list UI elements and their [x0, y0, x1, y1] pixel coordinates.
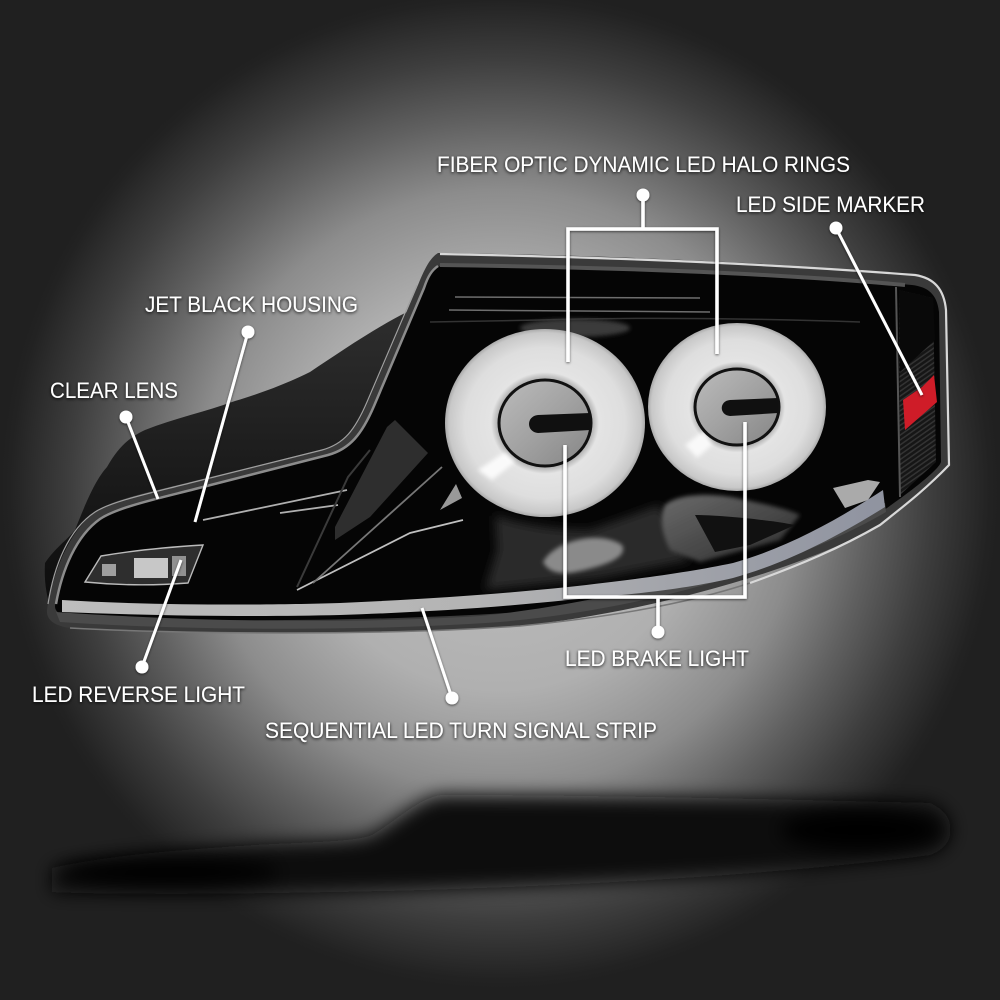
chrome trim left — [56, 266, 438, 604]
turn signal strip — [62, 490, 885, 616]
gray reflection panel — [335, 420, 428, 540]
right gray shape — [662, 495, 800, 562]
label: halo rings: FIBER OPTIC DYNAMIC LED HALO RINGS — [437, 152, 850, 177]
reverse line — [142, 560, 181, 667]
tail light assembly — [45, 253, 950, 633]
label: housing: JET BLACK HOUSING — [145, 292, 358, 317]
side marker panel — [896, 287, 937, 497]
housing line — [195, 332, 248, 522]
turn signal line — [422, 608, 452, 698]
label: brake light: LED BRAKE LIGHT — [565, 646, 749, 671]
top bezel band — [440, 265, 905, 285]
gloss bump — [543, 538, 623, 573]
center bar — [529, 413, 590, 433]
black lens body — [55, 265, 941, 620]
label: turn signal: SEQUENTIAL LED TURN SIGNAL STRIP — [265, 718, 657, 743]
inner lens — [499, 380, 591, 466]
center bar — [722, 398, 778, 416]
carbon fiber panel — [899, 290, 936, 495]
callout dots — [120, 188, 842, 704]
halo ring left — [445, 329, 645, 517]
label: clear lens: CLEAR LENS — [50, 378, 178, 403]
reverse light — [85, 545, 203, 585]
top slats — [430, 297, 860, 322]
chrome lens edge — [47, 253, 950, 633]
brake light bracket — [565, 422, 745, 632]
halo rings bracket — [568, 195, 717, 362]
label: reverse light: LED REVERSE LIGHT — [32, 682, 245, 707]
callout lines — [120, 188, 922, 704]
halo ring right — [648, 323, 826, 491]
label: side marker: LED SIDE MARKER — [736, 192, 925, 217]
inner lens — [695, 369, 779, 445]
right glossy highlight — [833, 480, 880, 508]
lower outer chrome line — [70, 583, 750, 633]
strip shadow band — [56, 503, 886, 629]
side marker line — [836, 228, 922, 395]
ring highlight — [478, 452, 515, 480]
housing fins — [203, 450, 463, 590]
floor shadow — [52, 795, 951, 894]
upper reflection between rings — [520, 319, 630, 337]
rear housing shell — [45, 312, 430, 612]
bright outer chrome line — [440, 254, 949, 583]
red reflector — [903, 375, 937, 430]
lower center gray region — [485, 505, 690, 590]
clear lens line — [126, 417, 158, 499]
ring highlight — [685, 430, 712, 458]
second inner trim — [48, 285, 417, 604]
